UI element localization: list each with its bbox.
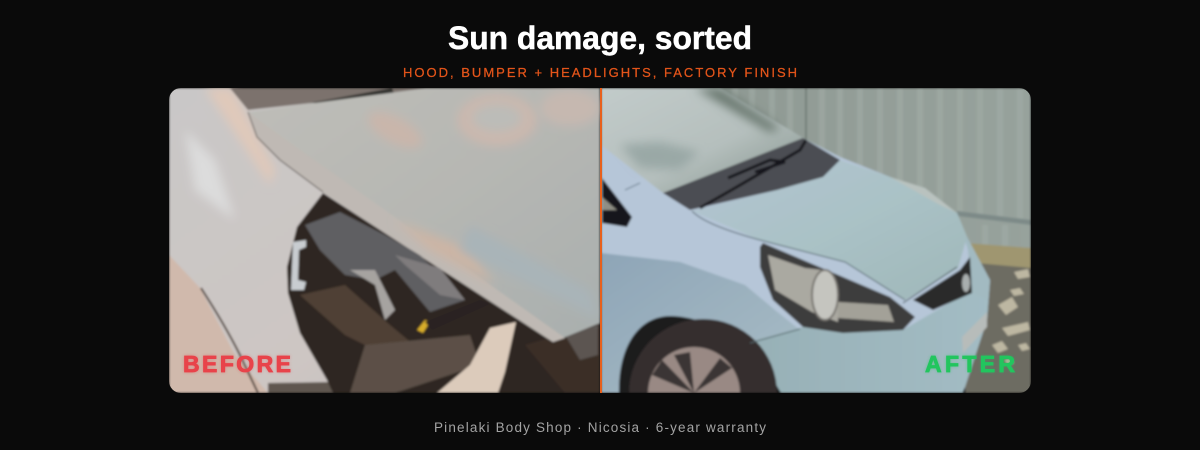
door line bbox=[625, 183, 640, 190]
bonnet edge line bbox=[692, 211, 905, 300]
headlight bbox=[760, 243, 915, 333]
panel: before photo bbox=[169, 88, 600, 393]
tyre bbox=[629, 319, 777, 393]
nose bbox=[966, 238, 990, 290]
fender highlight bbox=[186, 137, 232, 214]
car body upper side bbox=[602, 140, 970, 332]
fender bbox=[169, 88, 508, 393]
wheel arch bbox=[619, 316, 781, 393]
gravel stones bbox=[992, 269, 1030, 365]
label: after: AFTER bbox=[925, 351, 1015, 377]
footer caption: Pinelaki Body Shop · Nicosia · 6-year warranty bbox=[434, 420, 766, 435]
infographic canvas bbox=[169, 25, 1031, 435]
bonnet bbox=[692, 160, 967, 300]
front bumper bbox=[756, 292, 989, 393]
divider bbox=[600, 88, 602, 393]
windscreen bbox=[601, 88, 810, 193]
metal highlight bbox=[350, 270, 395, 320]
kerb bbox=[965, 243, 1031, 268]
cloud reflections bbox=[457, 94, 537, 146]
fence ribs bbox=[734, 89, 921, 185]
engine strip at top bbox=[230, 88, 427, 110]
number plate bbox=[962, 312, 987, 353]
label: before: BEFORE bbox=[183, 351, 291, 377]
hood outline bbox=[248, 112, 323, 192]
hood blue reflection bbox=[460, 225, 600, 320]
wipers bbox=[700, 140, 806, 208]
grille line bbox=[903, 267, 957, 303]
sill strip bbox=[268, 382, 335, 393]
label: before: BEFORE bbox=[183, 351, 291, 377]
hood peach reflection bbox=[410, 226, 490, 281]
ground bbox=[169, 255, 268, 393]
brown loom bbox=[300, 284, 408, 346]
before/after photo card bbox=[169, 88, 1031, 393]
fence bbox=[720, 88, 1031, 250]
badge bbox=[962, 274, 970, 292]
engine bay bbox=[287, 193, 600, 393]
hood bbox=[248, 88, 600, 342]
inner arch metal bbox=[305, 212, 465, 312]
headlight lens bbox=[812, 270, 838, 320]
cowl vent bbox=[310, 88, 394, 103]
far headlight bbox=[893, 178, 954, 212]
headlight reflector bbox=[768, 255, 838, 322]
ground gravel bbox=[965, 263, 1031, 393]
fence rail bbox=[957, 211, 1031, 225]
car body lower side bbox=[601, 253, 800, 393]
panel: after photo bbox=[601, 88, 1031, 393]
bay parts bbox=[350, 335, 480, 393]
rim bbox=[648, 347, 740, 393]
washer bottle bbox=[437, 322, 516, 393]
grille bbox=[913, 257, 972, 310]
rim spokes gaps bbox=[652, 352, 732, 393]
fender shadow crack bbox=[201, 288, 258, 393]
white bracket bbox=[291, 240, 306, 290]
title: Sun damage, sorted bbox=[448, 20, 752, 56]
windscreen reflection bbox=[620, 142, 700, 170]
cowl bbox=[663, 138, 840, 210]
subtitle: HOOD, BUMPER + HEADLIGHTS, FACTORY FINISH bbox=[403, 65, 797, 80]
fender sheen bbox=[205, 88, 275, 185]
hood edge fold bbox=[388, 220, 566, 343]
label: after: AFTER bbox=[925, 351, 1015, 377]
bumper seam bbox=[750, 329, 800, 343]
side window bbox=[602, 178, 632, 227]
